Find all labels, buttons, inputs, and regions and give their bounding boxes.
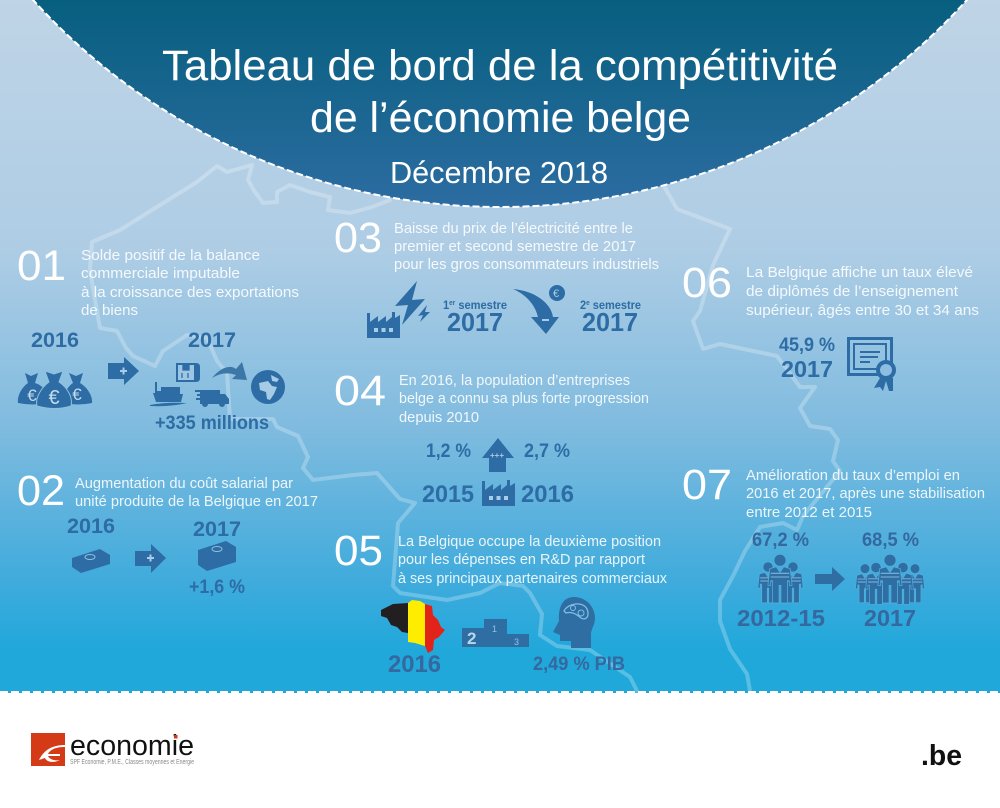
label 2017: 2017 <box>188 329 236 352</box>
value 1,2 %: 1,2 % <box>426 441 471 462</box>
value 68,5 %: 68,5 % <box>862 530 919 551</box>
text 05: pour les dépenses en R&D par rapport <box>398 551 646 568</box>
text 03: premier et second semestre de 2017 <box>394 238 636 255</box>
header dome <box>0 0 1000 207</box>
icon: globe <box>251 370 285 404</box>
label first semester: 1 <box>443 298 450 312</box>
logo: economie <box>31 730 194 766</box>
number 02: 02 <box>17 467 65 515</box>
text 01: à la croissance des exportations <box>81 284 299 301</box>
wordmark: economie <box>70 730 194 762</box>
icon: three workers <box>758 554 803 603</box>
value 2,7 %: 2,7 % <box>524 441 570 462</box>
icon: banknotes small <box>72 549 110 573</box>
text 02 <box>75 475 318 510</box>
icon: ship <box>150 382 187 406</box>
logo mark <box>31 733 65 766</box>
curved arrow <box>212 362 247 380</box>
label 2017: 2017 <box>582 307 638 337</box>
title: Tableau de bord de la compétitivité <box>162 42 838 90</box>
text 04: depuis 2010 <box>399 409 479 426</box>
label first semester: semestre <box>455 298 507 312</box>
text 02: unité produite de la Belgique en 2017 <box>75 493 318 510</box>
text 07: 2016 et 2017, après une stabilisation <box>746 485 985 502</box>
icon: factory and lightning <box>367 281 430 338</box>
footer band <box>0 693 1000 808</box>
section 02 <box>17 467 318 598</box>
text 04: En 2016, la population d’entreprises <box>399 372 630 389</box>
section 04 <box>334 367 649 508</box>
label 2016: 2016 <box>388 651 441 678</box>
text 04: belge a connu sa plus forte progression <box>399 390 649 407</box>
text 03: pour les gros consommateurs industriels <box>394 256 659 273</box>
section 03 <box>334 214 659 338</box>
arrow up <box>482 438 514 472</box>
label 2015: 2015 <box>422 481 474 508</box>
number 06: 06 <box>682 259 732 307</box>
icon: money bags: € <box>72 385 82 404</box>
text 07 <box>746 467 985 521</box>
icon: money bags: € <box>27 386 37 405</box>
label first semester: er <box>449 300 456 307</box>
red dot on i <box>174 735 178 738</box>
arrow plus <box>135 544 166 573</box>
text 01: de biens <box>81 302 138 319</box>
text 06: supérieur, âgés entre 30 et 34 ans <box>746 302 979 319</box>
icon: truck <box>195 390 229 407</box>
text 05: La Belgique occupe la deuxième position <box>398 533 661 550</box>
icon: banknotes large <box>198 541 236 571</box>
arrow up: +++ <box>490 451 504 460</box>
text 07: Amélioration du taux d’emploi en <box>746 467 960 484</box>
down arrow with euro <box>513 285 565 334</box>
icon: factory <box>482 480 515 506</box>
section 07 <box>682 461 985 631</box>
label 2017: 2017 <box>193 518 241 541</box>
arrow <box>815 567 845 591</box>
logo subtitle: SPF Economie, P.M.E., Classes moyennes et Energie <box>70 759 194 766</box>
section 05 <box>334 527 667 678</box>
icon: podium: 3 <box>514 637 519 647</box>
icon: parcel <box>176 363 200 382</box>
text 06: de diplômés de l’enseignement <box>746 283 959 300</box>
label 2017: 2017 <box>781 356 833 382</box>
number 07: 07 <box>682 461 732 509</box>
icon: podium: 1 <box>492 624 497 634</box>
text 04 <box>399 372 649 426</box>
text 01: Solde positif de la balance <box>81 247 260 264</box>
text 01: commerciale imputable <box>81 265 240 282</box>
number 03: 03 <box>334 214 382 262</box>
text 03 <box>394 220 659 273</box>
value 45,9 %: 45,9 % <box>779 335 835 356</box>
title <box>162 42 838 142</box>
value +335 millions: +335 millions <box>155 413 269 434</box>
map outline of Belgium <box>90 165 840 691</box>
text 06: La Belgique affiche un taux élevé <box>746 264 973 281</box>
icon: diploma <box>848 338 896 391</box>
title: de l’économie belge <box>310 94 691 142</box>
label 2016: 2016 <box>31 329 79 352</box>
text 03: Baisse du prix de l’électricité entre le <box>394 220 633 237</box>
icon: Belgian flag map <box>381 600 445 653</box>
text 06 <box>746 264 979 319</box>
number 04: 04 <box>334 367 386 415</box>
text 05 <box>398 533 667 587</box>
text 07: entre 2012 et 2015 <box>746 504 872 521</box>
section 01 <box>17 242 299 434</box>
icon: money bags: € <box>48 387 60 409</box>
label 2016: 2016 <box>521 481 574 508</box>
label 2016: 2016 <box>67 515 115 538</box>
icon: head with gears <box>553 597 595 648</box>
label second semester: e <box>586 300 590 307</box>
label second semester: semestre <box>590 298 641 312</box>
label 2012-15: 2012-15 <box>737 605 825 631</box>
text 01 <box>81 247 299 319</box>
icon: money bags <box>18 371 92 409</box>
label 2017: 2017 <box>447 307 503 337</box>
value 67,2 %: 67,2 % <box>752 530 809 551</box>
label 2017: 2017 <box>864 605 916 631</box>
label second semester: 2 <box>580 298 587 312</box>
value 2,49 % PIB: 2,49 % PIB <box>533 654 625 675</box>
down arrow with euro: € <box>553 288 559 300</box>
number 01: 01 <box>17 242 66 290</box>
icon: podium: 2 <box>467 629 476 648</box>
icon: podium <box>462 619 529 648</box>
logo: .be: .be <box>921 740 962 772</box>
number 05: 05 <box>334 527 383 575</box>
text 05: à ses principaux partenaires commerciaux <box>398 570 667 587</box>
text 02: Augmentation du coût salarial par <box>75 475 293 492</box>
icon: five workers <box>855 554 925 604</box>
value +1,6 %: +1,6 % <box>189 577 245 598</box>
section 06 <box>682 259 979 391</box>
arrow plus <box>108 357 139 385</box>
date subtitle: Décembre 2018 <box>390 155 608 190</box>
